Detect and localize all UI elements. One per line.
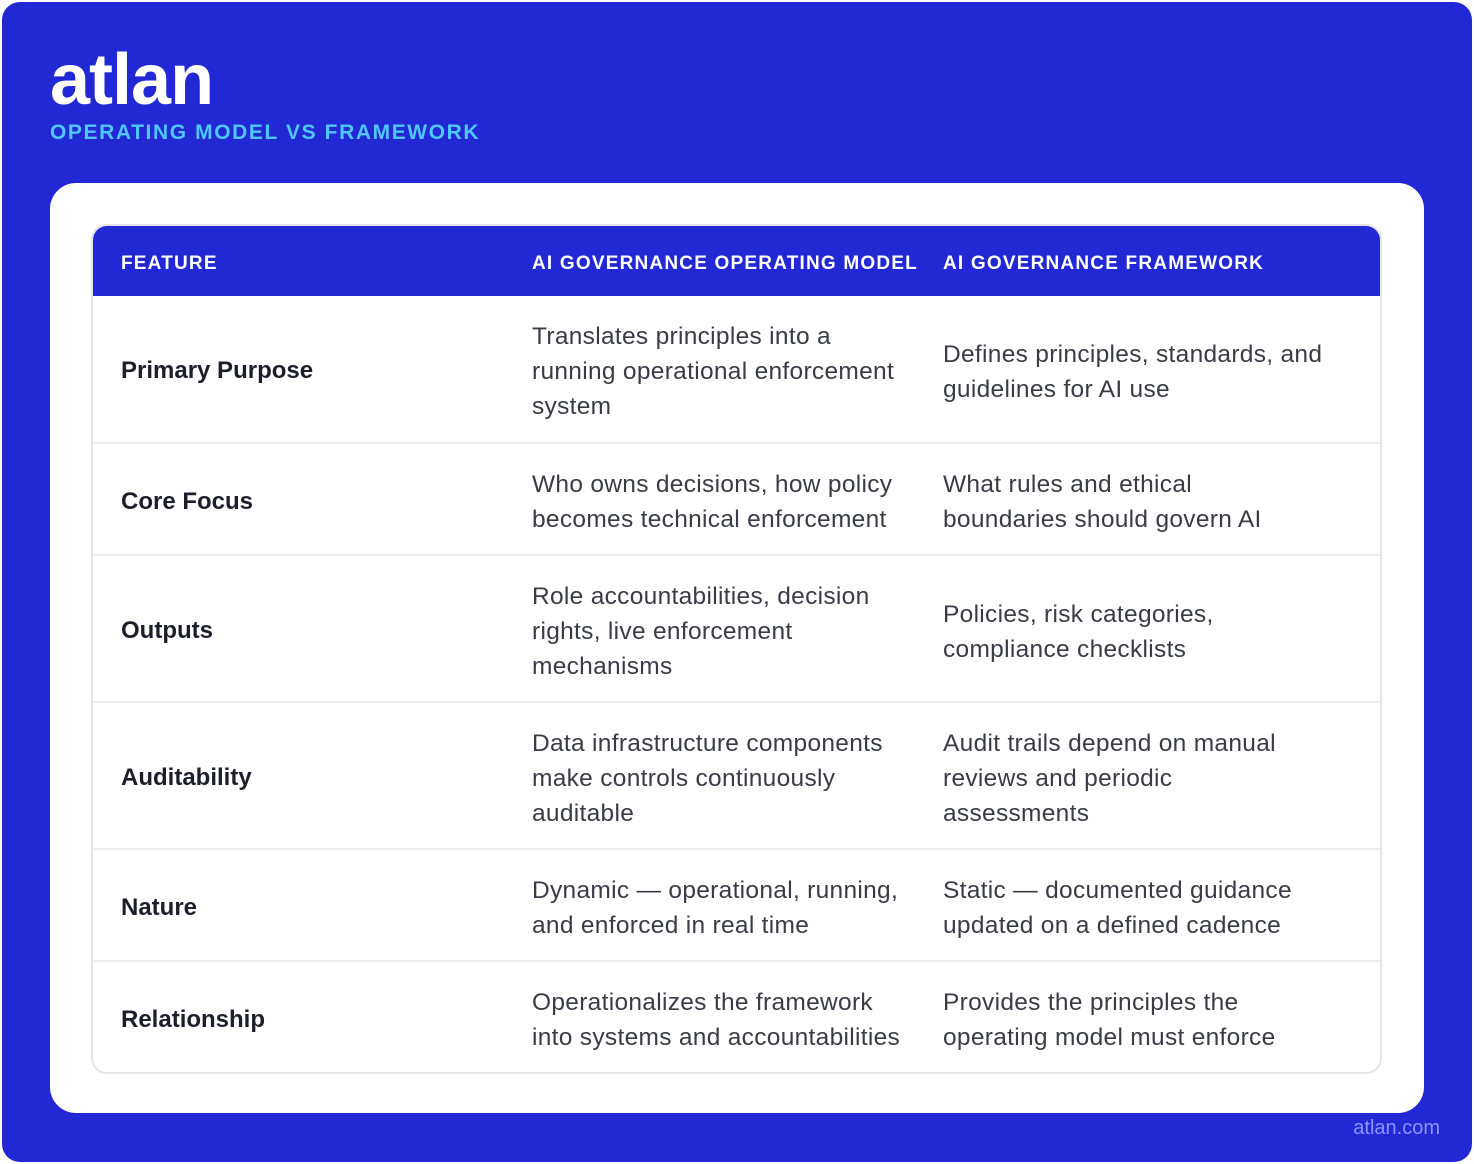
row: relationship (93, 960, 1380, 1074)
row: core focus: Core Focus (121, 488, 253, 515)
row: primary purpose (121, 323, 1322, 420)
row: primary purpose: running operational enforcement (532, 358, 894, 385)
row: outputs (93, 554, 1380, 703)
row: outputs: compliance checklists (943, 636, 1186, 663)
row: nature: updated on a defined cadence (943, 912, 1281, 939)
row: nature: Dynamic — operational, running, (532, 877, 898, 904)
row: core focus (93, 442, 1380, 556)
row: nature (93, 848, 1380, 962)
footer url: atlan.com (1353, 1117, 1440, 1139)
row: auditability: make controls continuously (532, 765, 835, 792)
row: primary purpose: Defines principles, standards, and (943, 341, 1322, 368)
table header: AI GOVERNANCE OPERATING MODEL (532, 253, 918, 274)
comparison table (91, 224, 1382, 1074)
row: relationship: operating model must enforce (943, 1024, 1276, 1051)
row: auditability: auditable (532, 800, 634, 827)
row: outputs: Policies, risk categories, (943, 601, 1214, 628)
row: core focus: boundaries should govern AI (943, 506, 1262, 533)
row: core focus: What rules and ethical (943, 471, 1192, 498)
row: nature: Nature (121, 894, 197, 921)
row: core focus: Who owns decisions, how policy (532, 471, 892, 498)
row: outputs: Outputs (121, 617, 213, 644)
row: primary purpose: system (532, 393, 611, 420)
row: outputs: rights, live enforcement (532, 618, 792, 645)
row: relationship: into systems and accountabilities (532, 1024, 900, 1051)
row: nature: and enforced in real time (532, 912, 809, 939)
table header: FEATURE (121, 253, 218, 274)
table header (93, 226, 1380, 296)
logo: atlan (50, 40, 213, 120)
row: primary purpose: guidelines for AI use (943, 376, 1170, 403)
row: relationship: Operationalizes the framework (532, 989, 873, 1016)
panel: card (50, 183, 1424, 1113)
row: primary purpose: Translates principles into a (532, 323, 831, 350)
row: outputs: Role accountabilities, decision (532, 583, 870, 610)
row: auditability: reviews and periodic (943, 765, 1172, 792)
row: core focus: becomes technical enforcement (532, 506, 887, 533)
row: auditability: assessments (943, 800, 1089, 827)
row: outputs: mechanisms (532, 653, 673, 680)
row: auditability (93, 701, 1380, 850)
row: relationship: Provides the principles the (943, 989, 1238, 1016)
table header: AI GOVERNANCE FRAMEWORK (943, 253, 1264, 274)
row: auditability: Audit trails depend on manual (943, 730, 1276, 757)
subtitle: OPERATING MODEL VS FRAMEWORK (50, 121, 480, 144)
row: auditability: Data infrastructure components (532, 730, 883, 757)
row: nature: Static — documented guidance (943, 877, 1292, 904)
row: relationship: Relationship (121, 1006, 265, 1033)
row: primary purpose: Primary Purpose (121, 357, 313, 384)
row: auditability: Auditability (121, 764, 252, 791)
